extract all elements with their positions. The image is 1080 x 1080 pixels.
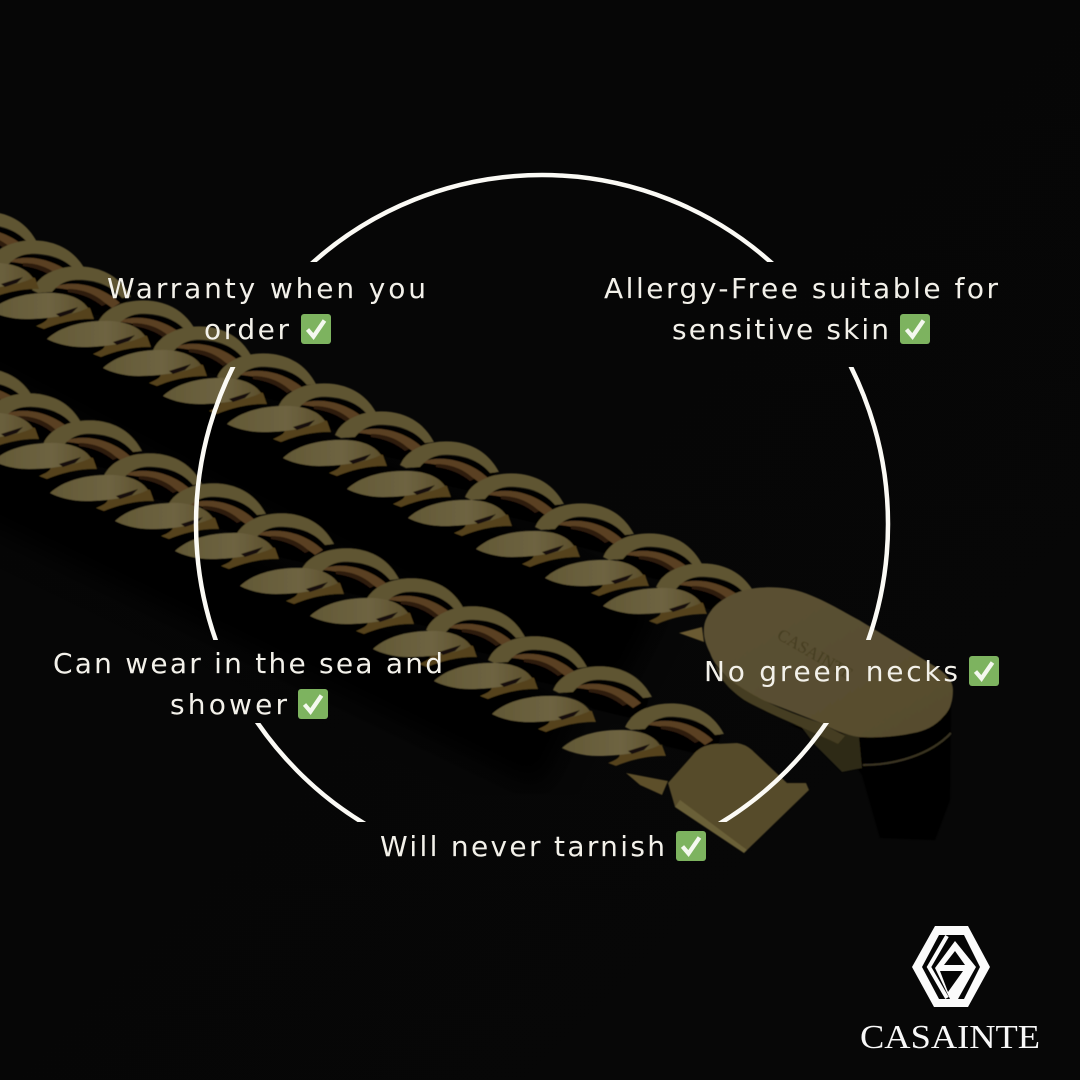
label: sea and shower — [53, 647, 443, 721]
lower chain — [0, 368, 724, 766]
logo icon: hexagon monogram — [912, 926, 990, 1007]
circle outline broken by labels — [196, 175, 888, 873]
shadow under chains — [0, 310, 640, 750]
chain bracelet photo — [0, 211, 953, 853]
upper clasp — [679, 587, 953, 840]
label: warranty — [107, 272, 426, 346]
upper chain — [0, 211, 755, 624]
label: warranty: order — [204, 313, 289, 346]
label: never tarnish: Will never tarnish — [380, 830, 665, 863]
label: allergy-free: sensitive skin — [672, 313, 889, 346]
label: sea and shower: shower — [170, 688, 287, 721]
upper clasp: CASAINTE — [774, 625, 856, 683]
label: warranty: Warranty when you — [107, 272, 426, 305]
label: allergy-free: Allergy-Free suitable for — [604, 272, 998, 305]
label: no green necks: No green necks — [704, 655, 958, 688]
lower clasp — [626, 743, 809, 853]
label: allergy-free — [604, 272, 998, 346]
logo wordmark: CASAINTE — [860, 1019, 1040, 1056]
label: sea and shower: Can wear in the sea and — [53, 647, 443, 680]
logo: casainte — [860, 926, 1040, 1056]
